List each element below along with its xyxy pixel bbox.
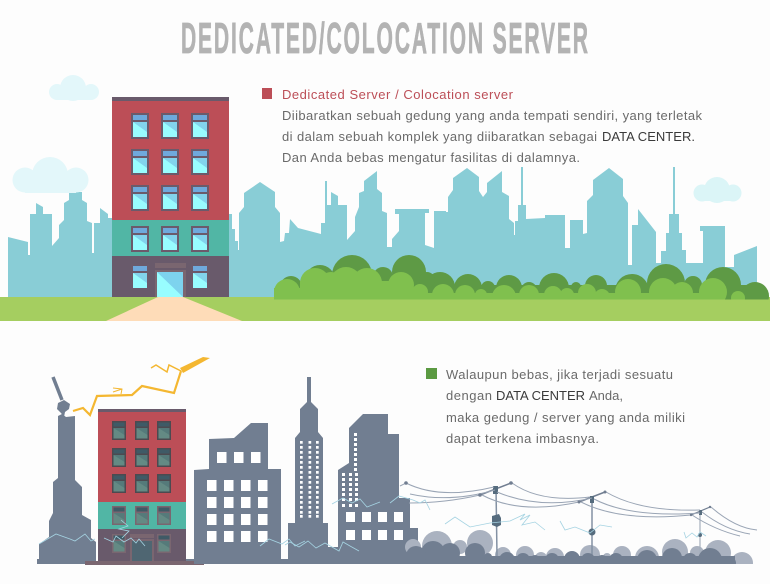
stepped tower (338, 414, 418, 564)
monument (37, 377, 96, 564)
power pole 2 (579, 492, 605, 556)
text block: dedicated server: Dan Anda bebas mengatur fasilitas di dalamnya. (282, 150, 580, 165)
damaged building (98, 409, 186, 561)
text block: dedicated server: di dalam sebuah komplek yang diibaratkan sebagai (282, 129, 597, 144)
cracks (39, 496, 706, 551)
bushes: gray light layer (405, 530, 753, 564)
text block: warning: Walaupun bebas, jika terjadi sesuatu (446, 367, 673, 382)
ground notch (281, 550, 288, 559)
cloud: middle left (12, 157, 88, 193)
gray office building (194, 423, 281, 564)
building base (85, 561, 204, 565)
power pole 3 (691, 507, 710, 553)
ground (0, 297, 770, 321)
wire end points (404, 481, 711, 516)
ground strip middle (281, 550, 420, 564)
skyline (8, 167, 757, 300)
bushes: light layer (274, 267, 745, 300)
ground strip left (186, 559, 196, 564)
bushes: dark layer (282, 255, 769, 300)
bushes: gray dark layer (407, 541, 736, 564)
cloud: right (694, 177, 742, 203)
text block: dedicated server: Diibaratkan sebuah gedung yang anda tempati sendiri, yang terletak (282, 108, 702, 123)
text block: warning (446, 367, 685, 446)
text block: warning: dengan (446, 388, 492, 403)
marker: red square (262, 88, 272, 99)
text block: warning: maka gedung / server yang anda miliki (446, 410, 685, 425)
panel: city scene with building (0, 75, 770, 321)
text block: dedicated server: Dedicated Server / Colocation server (282, 87, 514, 102)
power wires (400, 483, 757, 536)
text block: warning: dapat terkena imbasnya. (446, 431, 599, 446)
text block: warning: Anda, (589, 388, 623, 403)
title: DEDICATED/COLOCATION SERVER (181, 15, 588, 63)
path (106, 297, 242, 321)
text block: warning: DATA CENTER (496, 388, 585, 403)
cloud: top left (49, 75, 99, 101)
text block: dedicated server: DATA CENTER. (602, 129, 695, 144)
tall tower (288, 377, 338, 564)
marker: green square (426, 368, 437, 379)
text block: dedicated server (282, 87, 702, 165)
power pole 1 (480, 483, 511, 556)
lightning (73, 357, 210, 415)
panel: damaged city scene (37, 357, 757, 574)
building (112, 97, 229, 297)
